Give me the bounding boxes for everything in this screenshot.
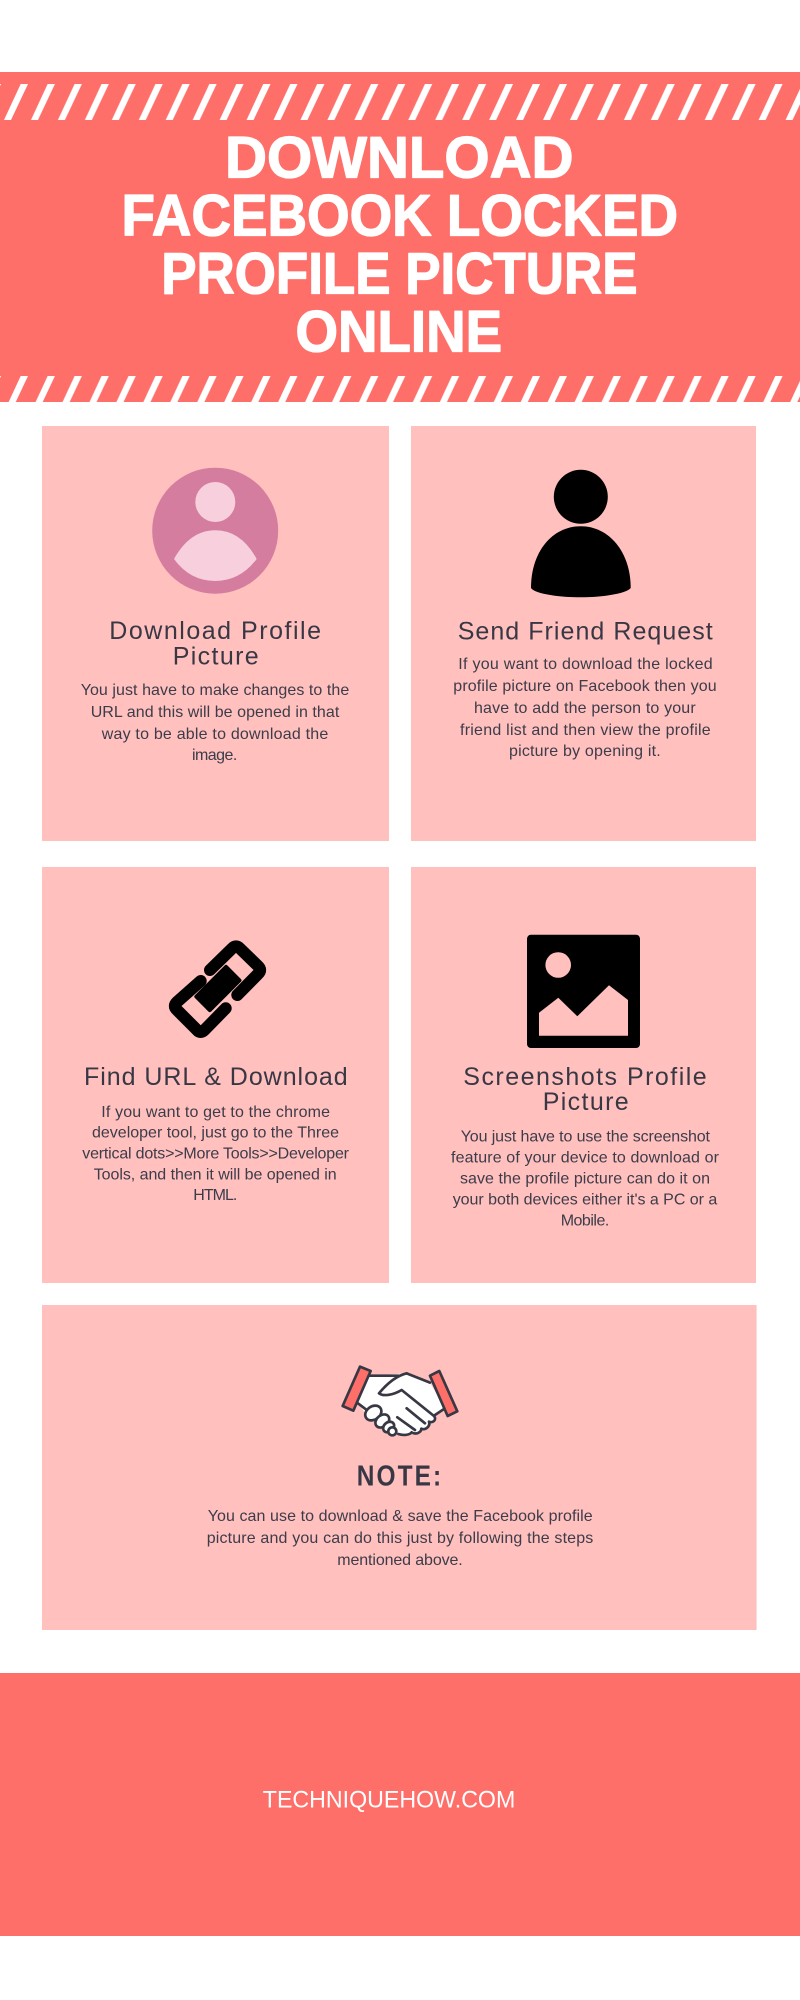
- body text: URL and this will be opened in that: [91, 704, 340, 721]
- heading: Screenshots Profile: [463, 1063, 707, 1091]
- icon: chain link: [175, 946, 260, 1032]
- heading: Send Friend Request: [458, 618, 713, 646]
- footer banner: [0, 1673, 800, 1936]
- body text: [82, 1104, 350, 1204]
- body text: If you want to get to the chrome: [101, 1104, 330, 1121]
- body text: You can use to download & save the Facebook profile: [208, 1508, 593, 1525]
- icon: image picture: [527, 935, 640, 1048]
- panel: screenshots profile picture: [411, 867, 756, 1283]
- body text: profile picture on Facebook then you: [453, 678, 717, 695]
- icon: person silhouette: [531, 470, 631, 597]
- heading: Download Profile: [109, 617, 321, 645]
- body text: You just have to make changes to the: [81, 682, 349, 699]
- heading: [109, 617, 321, 670]
- body text: picture by opening it.: [509, 743, 661, 760]
- body text: vertical dots>>More Tools>>Developer: [82, 1145, 350, 1162]
- body text: If you want to download the locked: [458, 656, 713, 673]
- icon: profile avatar: [152, 468, 278, 594]
- footer text: TECHNIQUEHOW.COM: [263, 1786, 515, 1813]
- body text: way to be able to download the: [101, 726, 328, 743]
- body text: developer tool, just go to the Three: [92, 1124, 339, 1141]
- body text: your both devices either it's a PC or a: [453, 1191, 717, 1208]
- panel: download profile picture: [42, 426, 389, 841]
- heading: Picture: [173, 642, 259, 670]
- heading: note: NOTE:: [357, 1461, 443, 1493]
- title: FACEBOOK LOCKED: [122, 184, 678, 248]
- panel: find url and download: [42, 867, 389, 1283]
- title: ONLINE: [296, 300, 502, 364]
- body text: [81, 682, 349, 764]
- panel: note: [42, 1305, 757, 1630]
- title: PROFILE PICTURE: [161, 242, 637, 306]
- body text: You just have to use the screenshot: [461, 1128, 711, 1145]
- body text: Mobile.: [561, 1212, 609, 1229]
- title: [122, 126, 678, 364]
- icon: handshake: [343, 1367, 457, 1435]
- header banner: [0, 72, 800, 402]
- body text: save the profile picture can do it on: [460, 1170, 710, 1187]
- heading: Picture: [543, 1088, 629, 1116]
- body text: [451, 1128, 720, 1229]
- body text: [453, 656, 717, 760]
- body text: mentioned above.: [337, 1552, 463, 1569]
- body text: feature of your device to download or: [451, 1149, 720, 1166]
- body text: picture and you can do this just by following the steps: [207, 1530, 593, 1547]
- heading: [463, 1063, 707, 1116]
- body text: have to add the person to your: [474, 700, 696, 717]
- body text: [207, 1508, 593, 1569]
- body text: image.: [192, 747, 237, 764]
- panel: send friend request: [411, 426, 756, 841]
- body text: Tools, and then it will be opened in: [94, 1166, 337, 1183]
- body text: HTML.: [193, 1187, 237, 1204]
- heading: Find URL & Download: [84, 1063, 348, 1091]
- title: DOWNLOAD: [225, 126, 574, 190]
- body text: friend list and then view the profile: [460, 722, 711, 739]
